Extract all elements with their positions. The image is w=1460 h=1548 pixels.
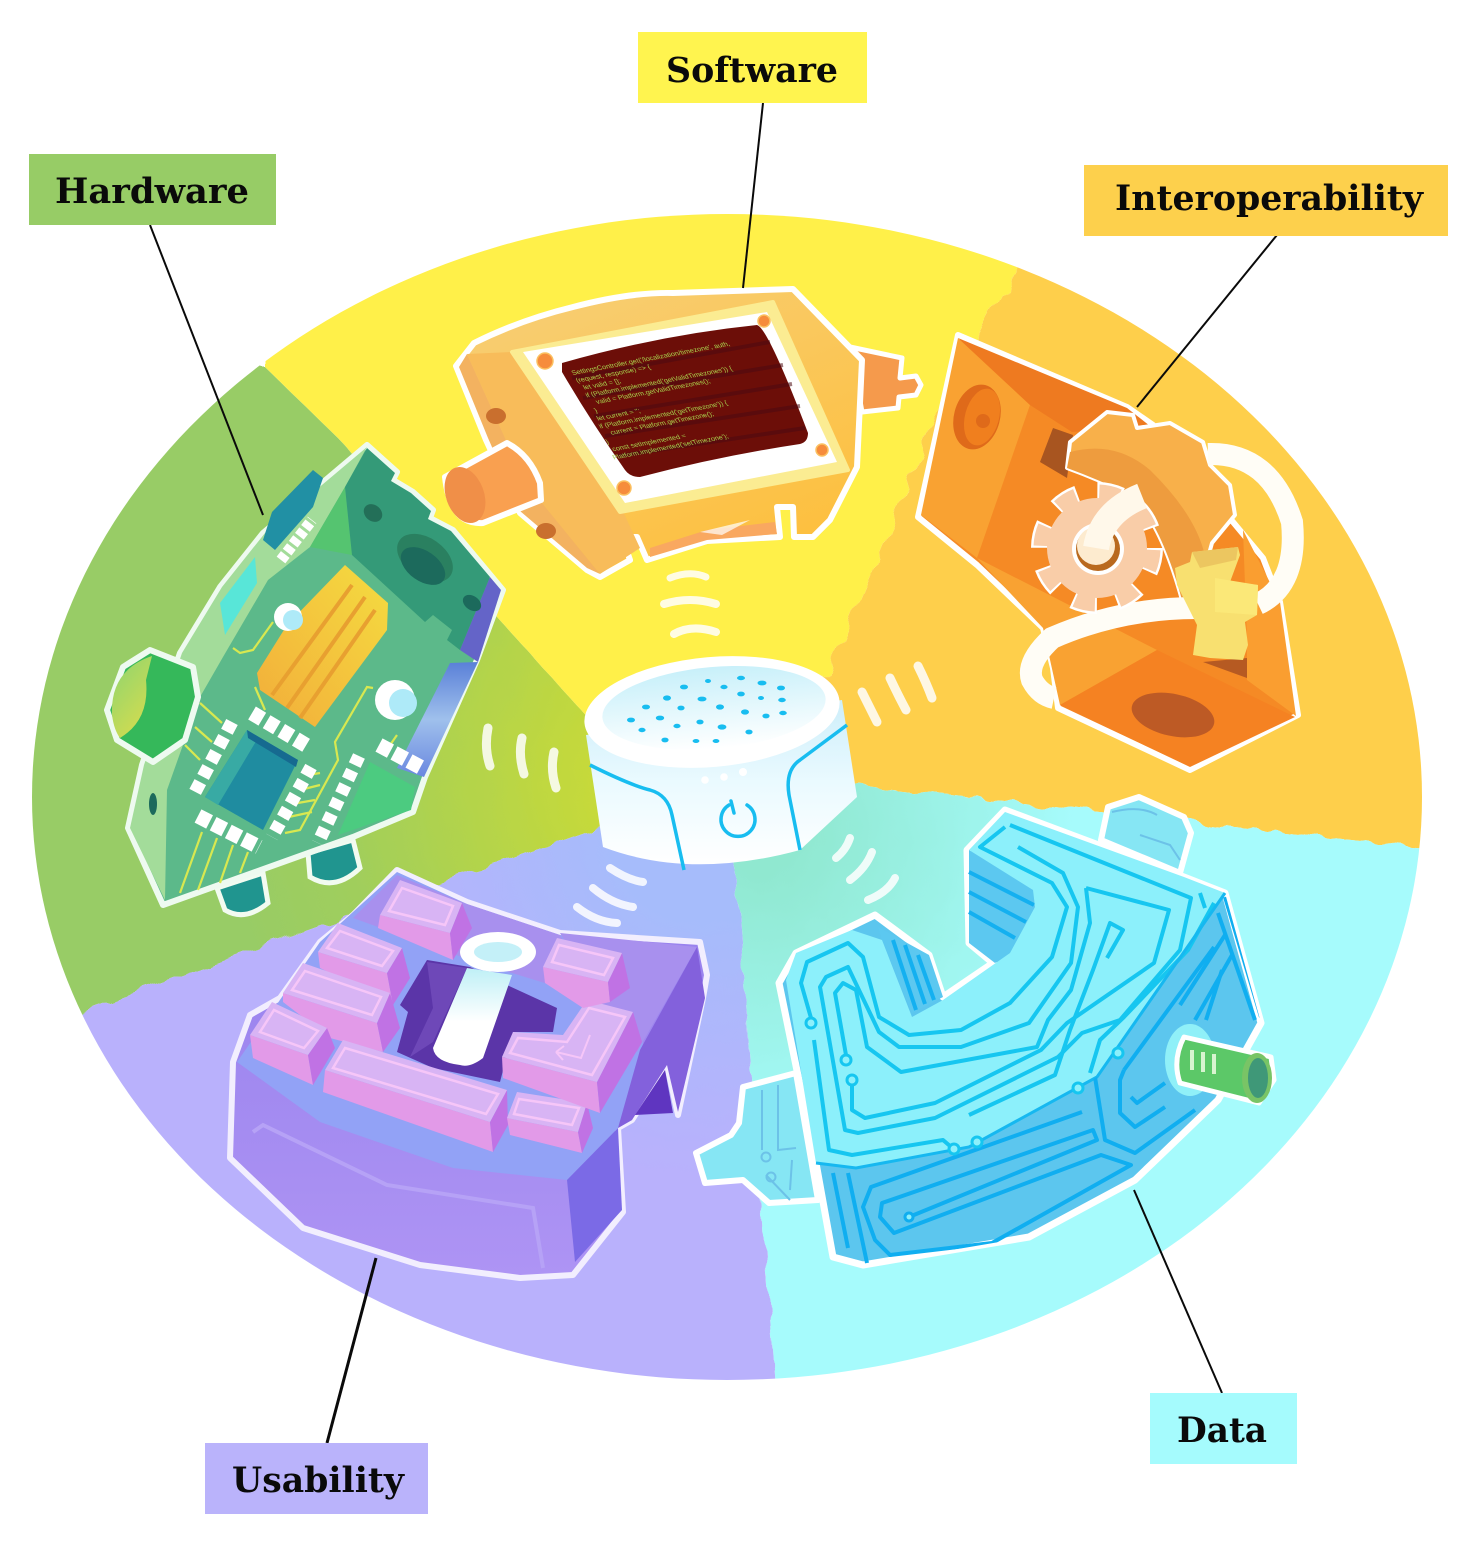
keys [250, 880, 642, 1153]
right side strip [1243, 530, 1296, 716]
left arch side with stripes [878, 927, 943, 1013]
code text on screen: if (Platform.implemented('getValidTimezones')) { [585, 366, 735, 399]
code text on screen: (request, response) => { [575, 364, 653, 384]
side behind arch with stripes [969, 850, 1035, 963]
key: second row [318, 923, 410, 1005]
label: Hardware [29, 154, 276, 225]
mid green panel [310, 487, 352, 555]
pale left strip [130, 447, 367, 900]
code text on screen: } [605, 439, 611, 446]
contact dots [806, 1018, 1123, 1221]
side bolts [486, 408, 556, 539]
component: hardware circuit board [107, 445, 503, 915]
leader: usability [327, 1258, 376, 1443]
right dark face [618, 947, 705, 1128]
circuit traces [180, 622, 397, 893]
code text on screen: current = Platform.getTimezone(); [609, 411, 716, 437]
dark green upper section [345, 448, 490, 650]
screen scan lines [572, 342, 805, 456]
label: Usability [205, 1443, 428, 1514]
code text on screen: valid = Platform.getValidTimezones(); [595, 378, 712, 406]
component: software device [437, 289, 921, 577]
left lower panel shade [467, 352, 640, 574]
tube into gear [1096, 496, 1142, 548]
lower left face [977, 558, 1157, 705]
lower mounting holes [149, 500, 484, 815]
sector: usability purple [82, 826, 776, 1380]
leader lines [150, 103, 1277, 1443]
left peg [696, 1073, 818, 1203]
lower faces with traces [833, 897, 1261, 1263]
socket hole [946, 379, 1008, 455]
code text on screen [564, 341, 779, 461]
leader: hardware [150, 225, 263, 515]
key: space bar [323, 1040, 508, 1152]
background disc: five coloured sectors [32, 214, 1422, 1380]
wood top face [958, 338, 1150, 432]
lower pegs [217, 840, 360, 915]
left cylinder [107, 650, 198, 762]
top face traces [801, 825, 1214, 1155]
chip pins [193, 713, 424, 847]
power icon [721, 801, 755, 836]
key: top row right [543, 938, 630, 1008]
pale gear [1041, 492, 1153, 604]
label: Usability: Usability [232, 1460, 406, 1501]
ridge line [816, 893, 1225, 1168]
top peg [1101, 797, 1191, 873]
device body [456, 289, 862, 577]
sector: interoperability orange [820, 267, 1422, 848]
sector: software yellow [265, 214, 1018, 714]
lower right bright panel [338, 762, 415, 835]
screen frame [512, 302, 848, 512]
code text on screen: const setImplemented = [611, 433, 688, 453]
blue edge strip [397, 662, 478, 777]
bottom hole [1128, 686, 1218, 744]
yellow heat sink [257, 565, 388, 727]
leader: software [743, 103, 763, 288]
lower right face [567, 1128, 622, 1262]
underside highlight [650, 522, 777, 557]
speaker holes [627, 676, 787, 743]
body seams [590, 725, 847, 870]
main chip [205, 730, 298, 830]
leader: data [1134, 1190, 1222, 1393]
left side shade [459, 354, 600, 574]
key: lower right [507, 1092, 593, 1153]
yellow gear [1175, 547, 1258, 660]
left face [921, 338, 1030, 558]
sector: data cyan [720, 785, 1460, 1450]
white loop tube [1031, 454, 1293, 698]
code text on screen: let valid = []; [582, 378, 623, 391]
wedge body [918, 335, 1298, 770]
label: Interoperability: Interoperability [1115, 178, 1425, 219]
key: third row wide [283, 963, 400, 1052]
key: fourth row left [250, 1002, 335, 1085]
right green peg [1165, 1024, 1274, 1103]
top face [786, 812, 1225, 1168]
speaker top rim [580, 646, 844, 778]
capacitors [274, 603, 417, 720]
key: top row left [378, 880, 472, 960]
code text on screen: } [593, 408, 600, 414]
upper lilac surface [560, 933, 697, 1052]
purple edge [460, 577, 501, 662]
label: Data [1150, 1393, 1297, 1464]
label: Data: Data [1177, 1410, 1267, 1451]
code text on screen: let current = ''; [596, 408, 642, 422]
central speaker device [580, 646, 857, 870]
component: usability keyboard [230, 870, 707, 1278]
code text on screen: if (Platform.implemented('getTimezone')) { [598, 400, 730, 430]
label: Software: Software [666, 50, 838, 91]
signal waves around speaker [486, 574, 932, 923]
shadow under yellow gear [1203, 658, 1247, 678]
arch gap [635, 1070, 673, 1115]
center hole [397, 960, 557, 1082]
key: enter [502, 1000, 642, 1113]
component: data block [696, 797, 1274, 1265]
periwinkle top surface [237, 872, 660, 1180]
square notch [1040, 428, 1073, 478]
screws [537, 315, 828, 495]
large gear [1067, 412, 1235, 600]
label: Hardware: Hardware [55, 171, 249, 212]
right connector [850, 347, 921, 412]
bottom face [1060, 650, 1295, 767]
speaker top recess [599, 657, 829, 759]
speaker body [586, 700, 857, 864]
pin row top [281, 520, 312, 560]
left connector [437, 443, 541, 529]
component: interoperability gears [918, 335, 1298, 770]
status lights [701, 768, 747, 784]
code text on screen: SettingsController.get('/localization/timezone', auth, [571, 341, 732, 377]
base [230, 870, 707, 1278]
top teal chip [263, 470, 323, 550]
screen [562, 325, 808, 477]
board outline [128, 445, 503, 905]
code text on screen: Platform.implemented('setTimezone'); [611, 434, 730, 461]
white post [433, 932, 536, 1066]
front panel inset [253, 1125, 543, 1268]
label: Software [638, 32, 867, 103]
sector: hardware green [32, 366, 600, 1015]
leader: interoperability [1137, 235, 1277, 407]
block outline [779, 810, 1261, 1265]
label: Interoperability [1084, 165, 1448, 236]
cyan component [220, 557, 257, 635]
